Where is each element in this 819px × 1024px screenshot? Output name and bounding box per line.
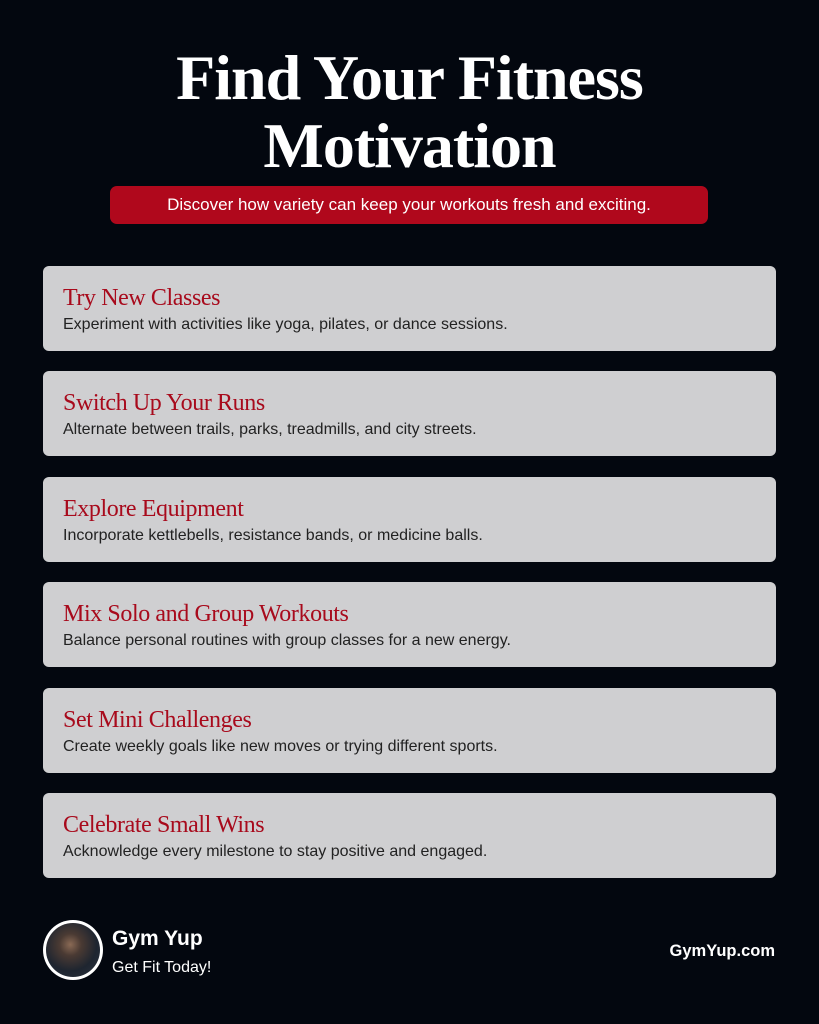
card: celebrate small wins: Acknowledge every milestone to stay positive and engaged.: [63, 843, 487, 860]
card: try new classes: Experiment with activities like yoga, pilates, or dance sessions.: [63, 316, 508, 333]
card: set mini challenges: Set Mini Challenges: [63, 707, 251, 733]
brand text: Gym Yup: [112, 927, 203, 950]
website: GymYup.com: [670, 942, 775, 960]
card: mix solo and group: Balance personal routines with group classes for a new energy.: [63, 632, 511, 649]
card: try new classes: [43, 266, 776, 351]
card: mix solo and group: [43, 582, 776, 667]
card: set mini challenges: Create weekly goals like new moves or trying different sports.: [63, 738, 498, 755]
card: explore equipment: [43, 477, 776, 562]
brand text: [112, 927, 211, 976]
card: try new classes: Try New Classes: [63, 285, 220, 311]
card: celebrate small wins: Celebrate Small Wins: [63, 812, 264, 838]
subtitle pill: Discover how variety can keep your workouts fresh and exciting.: [167, 195, 651, 214]
card: explore equipment: Explore Equipment: [63, 496, 244, 522]
icon: logo avatar: [43, 920, 103, 980]
title: Find Your Fitness: [176, 42, 643, 113]
title: [176, 42, 643, 181]
card: celebrate small wins: [43, 793, 776, 878]
subtitle pill: [110, 186, 708, 224]
card: explore equipment: Incorporate kettlebells, resistance bands, or medicine balls.: [63, 527, 483, 544]
card: switch up your runs: [43, 371, 776, 456]
card: mix solo and group: Mix Solo and Group Workouts: [63, 601, 348, 627]
title: Motivation: [263, 110, 556, 181]
card: switch up your runs: Alternate between trails, parks, treadmills, and city streets.: [63, 421, 477, 438]
card: set mini challenges: [43, 688, 776, 773]
brand text: Get Fit Today!: [112, 959, 211, 976]
card: switch up your runs: Switch Up Your Runs: [63, 390, 265, 416]
